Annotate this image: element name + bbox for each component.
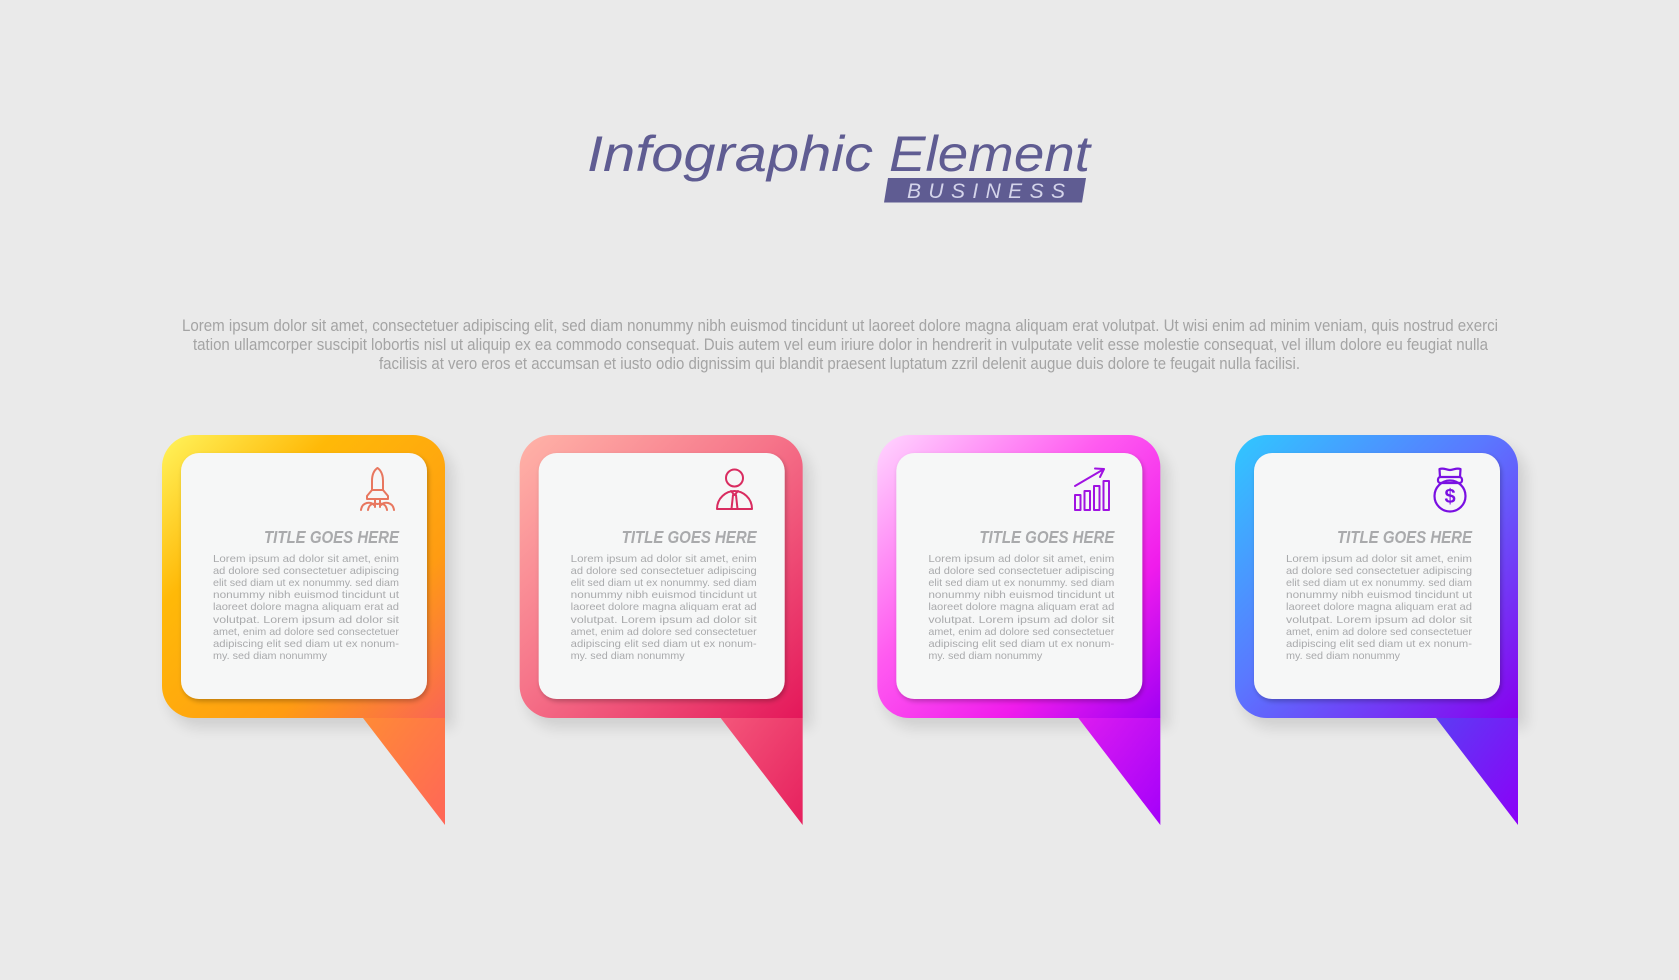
card body text: amet, enim ad dolore sed consectetuer xyxy=(1286,627,1473,638)
card body text: Lorem ipsum ad dolor sit amet, enim xyxy=(1286,554,1472,565)
card body text: elit sed diam ut ex nonummy. sed diam xyxy=(1286,578,1472,589)
card body text: nonummy nibh euismod tincidunt ut xyxy=(1286,590,1472,601)
card body text: adipiscing elit sed diam ut ex nonum- xyxy=(213,639,399,650)
inner white box xyxy=(1254,453,1500,699)
card body text: Lorem ipsum ad dolor sit amet, enim xyxy=(571,554,757,565)
card body text: Lorem ipsum ad dolor sit amet, enim xyxy=(928,554,1114,565)
title xyxy=(587,126,1092,182)
panel: card 2 person xyxy=(520,435,811,825)
card body text: volutpat. Lorem ipsum ad dolor sit xyxy=(1286,615,1472,626)
card body text: my. sed diam nonummy xyxy=(213,651,328,662)
card body text: my. sed diam nonummy xyxy=(928,651,1043,662)
intro paragraph: facilisis at vero eros et accumsan et iusto odio dignissim qui blandit praesent luptatum zzril delenit augue duis dolore te feugait nulla facilisi. xyxy=(379,354,1300,373)
card title: TITLE GOES HERE xyxy=(264,527,400,547)
tail pointer xyxy=(721,718,803,825)
card body text xyxy=(213,554,400,662)
icon: person xyxy=(717,470,752,509)
card body text: nonummy nibh euismod tincidunt ut xyxy=(928,590,1114,601)
intro paragraph: tation ullamcorper suscipit lobortis nisl ut aliquip ex ea commodo consequat. Duis autem vel eum iriure dolor in hendrerit in vulputate velit esse molestie consequat, vel illum dolore eu feugiat nulla xyxy=(193,335,1488,354)
card body text: Lorem ipsum ad dolor sit amet, enim xyxy=(213,554,399,565)
card body text xyxy=(928,554,1115,662)
card title: TITLE GOES HERE xyxy=(622,527,758,547)
card body text: laoreet dolore magna aliquam erat ad xyxy=(571,602,757,613)
icon: money bag xyxy=(1434,469,1466,512)
card title: TITLE GOES HERE xyxy=(1337,527,1473,547)
card body text: my. sed diam nonummy xyxy=(571,651,685,662)
outer gradient frame xyxy=(162,435,445,718)
icon: growth chart xyxy=(1075,468,1109,510)
card body text: nonummy nibh euismod tincidunt ut xyxy=(571,590,757,601)
icon: money bag: $ xyxy=(1444,486,1456,508)
card body text xyxy=(571,554,757,662)
card body text: volutpat. Lorem ipsum ad dolor sit xyxy=(571,615,757,626)
title: Infographic xyxy=(587,126,873,182)
outer gradient frame xyxy=(1235,435,1518,718)
panel: card 3 growth chart xyxy=(877,435,1168,825)
title: Element xyxy=(889,126,1092,182)
panel: card 1 rocket xyxy=(162,435,453,825)
card body text xyxy=(1286,554,1473,662)
card title: TITLE GOES HERE xyxy=(979,527,1115,547)
card body text: adipiscing elit sed diam ut ex nonum- xyxy=(1286,639,1472,650)
intro paragraph xyxy=(182,316,1498,373)
card body text: my. sed diam nonummy xyxy=(1286,651,1401,662)
card body text: volutpat. Lorem ipsum ad dolor sit xyxy=(928,615,1114,626)
card body text: ad dolore sed consectetuer adipiscing xyxy=(928,566,1115,577)
inner white box xyxy=(539,453,785,699)
card body text: elit sed diam ut ex nonummy. sed diam xyxy=(571,578,757,589)
outer gradient frame xyxy=(520,435,803,718)
card body text: laoreet dolore magna aliquam erat ad xyxy=(928,602,1115,613)
tail pointer xyxy=(363,718,445,825)
tail pointer xyxy=(1078,718,1160,825)
intro paragraph: Lorem ipsum dolor sit amet, consectetuer adipiscing elit, sed diam nonummy nibh euismod tincidunt ut laoreet dolore magna aliquam erat volutpat. Ut wisi enim ad minim veniam, quis nostrud exerci xyxy=(182,316,1498,335)
card body text: volutpat. Lorem ipsum ad dolor sit xyxy=(213,615,399,626)
card body text: adipiscing elit sed diam ut ex nonum- xyxy=(571,639,757,650)
card body text: ad dolore sed consectetuer adipiscing xyxy=(213,566,399,577)
card body text: ad dolore sed consectetuer adipiscing xyxy=(571,566,757,577)
card body text: adipiscing elit sed diam ut ex nonum- xyxy=(928,639,1114,650)
card body text: nonummy nibh euismod tincidunt ut xyxy=(213,590,399,601)
panel: card 4 money bag xyxy=(1235,435,1526,825)
card body text: amet, enim ad dolore sed consectetuer xyxy=(928,627,1115,638)
subtitle banner: business: BUSINESS xyxy=(907,180,1065,203)
outer gradient frame xyxy=(877,435,1160,718)
card body text: laoreet dolore magna aliquam erat ad xyxy=(1286,602,1472,613)
card body text: ad dolore sed consectetuer adipiscing xyxy=(1286,566,1472,577)
inner white box xyxy=(896,453,1142,699)
inner white box xyxy=(181,453,427,699)
card body text: elit sed diam ut ex nonummy. sed diam xyxy=(213,578,399,589)
card body text: elit sed diam ut ex nonummy. sed diam xyxy=(928,578,1114,589)
card body text: laoreet dolore magna aliquam erat ad xyxy=(213,602,399,613)
card body text: amet, enim ad dolore sed consectetuer xyxy=(571,627,757,638)
icon: rocket xyxy=(361,468,394,510)
card body text: amet, enim ad dolore sed consectetuer xyxy=(213,627,400,638)
tail pointer xyxy=(1436,718,1518,825)
